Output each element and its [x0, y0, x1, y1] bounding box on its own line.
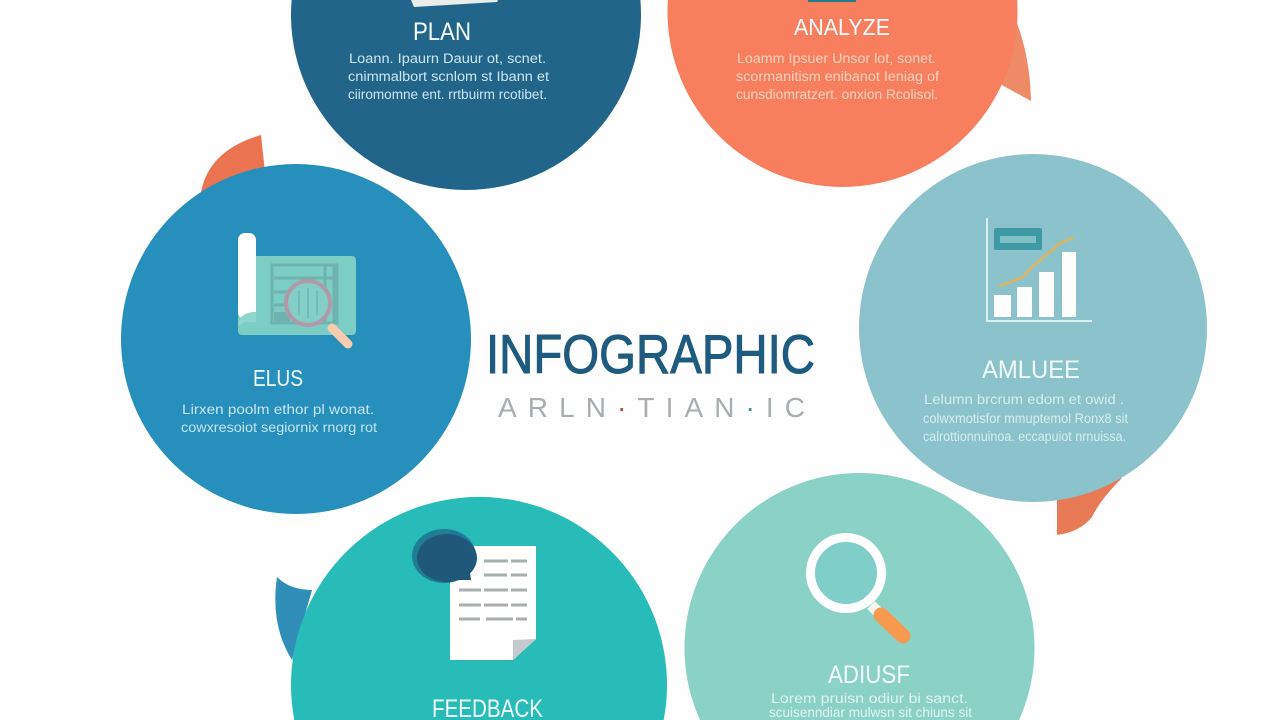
analyse circle: [859, 154, 1207, 502]
analyze text block: scormanitism enibanot Ieniag of: [736, 69, 939, 84]
feedback circle: [291, 497, 667, 720]
analyze heading: ANALYZE: [794, 14, 890, 40]
title: INFOGRAPHIC: [486, 323, 815, 385]
panel: plan: [291, 0, 641, 190]
feedback pointer tail: [275, 577, 312, 660]
icon: blueprint with magnifier: [238, 233, 356, 344]
icon: plan document edge: [411, 0, 498, 7]
plus text block: Lirxen poolm ethor pl wonat.: [182, 402, 374, 417]
analyze text block: Loamm Ipsuer Unsor lot, sonet.: [737, 51, 936, 66]
analyze text block: [736, 51, 939, 102]
panel: analyse: [859, 154, 1207, 535]
plus heading: ELUS: [253, 365, 303, 391]
adjust heading: ADIUSF: [828, 661, 910, 689]
icon: document with speech bubble: [412, 529, 536, 660]
panel: analyze: [668, 0, 1031, 187]
panel: plus: [121, 135, 471, 514]
adjust text block: scuisenndiar mulwsn sit chiuns sit: [769, 705, 972, 720]
plan text block: cnimmalbort scnlom st Ibann et: [348, 69, 549, 84]
plan heading: PLAN: [413, 18, 471, 46]
analyse text block: colwxmotisfor mmuptemol Ronx8 sit: [923, 411, 1128, 426]
analyse pointer tail: [1057, 478, 1122, 535]
adjust text block: [769, 691, 972, 720]
panel: adjust: [684, 473, 1034, 720]
analyze pointer tail: [1000, 18, 1031, 101]
plus circle: [121, 164, 471, 514]
adjust text block: Lorem pruisn odiur bi sanct.: [771, 691, 968, 706]
icon: magnifying glass: [810, 538, 903, 636]
plus pointer tail: [201, 135, 265, 192]
analyze text block: cunsdiomratzert. onxion Rcolisol.: [736, 87, 938, 102]
analyze circle: [668, 0, 1017, 187]
analyse text block: Lelumn brcrum edom et owid .: [924, 392, 1124, 407]
panel: feedback: [275, 497, 667, 720]
adjust circle: [684, 473, 1034, 720]
icon: bar chart: [987, 218, 1092, 321]
plus text block: cowxresoiot segiornix rnorg rot: [181, 420, 377, 435]
analyse text block: calrottionnuinoa. eccapuiot nrnuissa.: [923, 429, 1126, 444]
analyse text block: [923, 392, 1128, 444]
plan text block: Loann. Ipaurn Dauur ot, scnet.: [349, 51, 546, 66]
icon: analyze chart edge: [808, 0, 856, 2]
plus text block: [181, 402, 377, 435]
analyse heading: AMLUEE: [982, 356, 1080, 384]
plan circle: [291, 0, 641, 190]
plan text block: ciiromomne ent. rrtbuirm rcotibet.: [348, 87, 547, 102]
subtitle: ARLN · TIAN · IC: [498, 392, 805, 423]
plan text block: [348, 51, 549, 102]
